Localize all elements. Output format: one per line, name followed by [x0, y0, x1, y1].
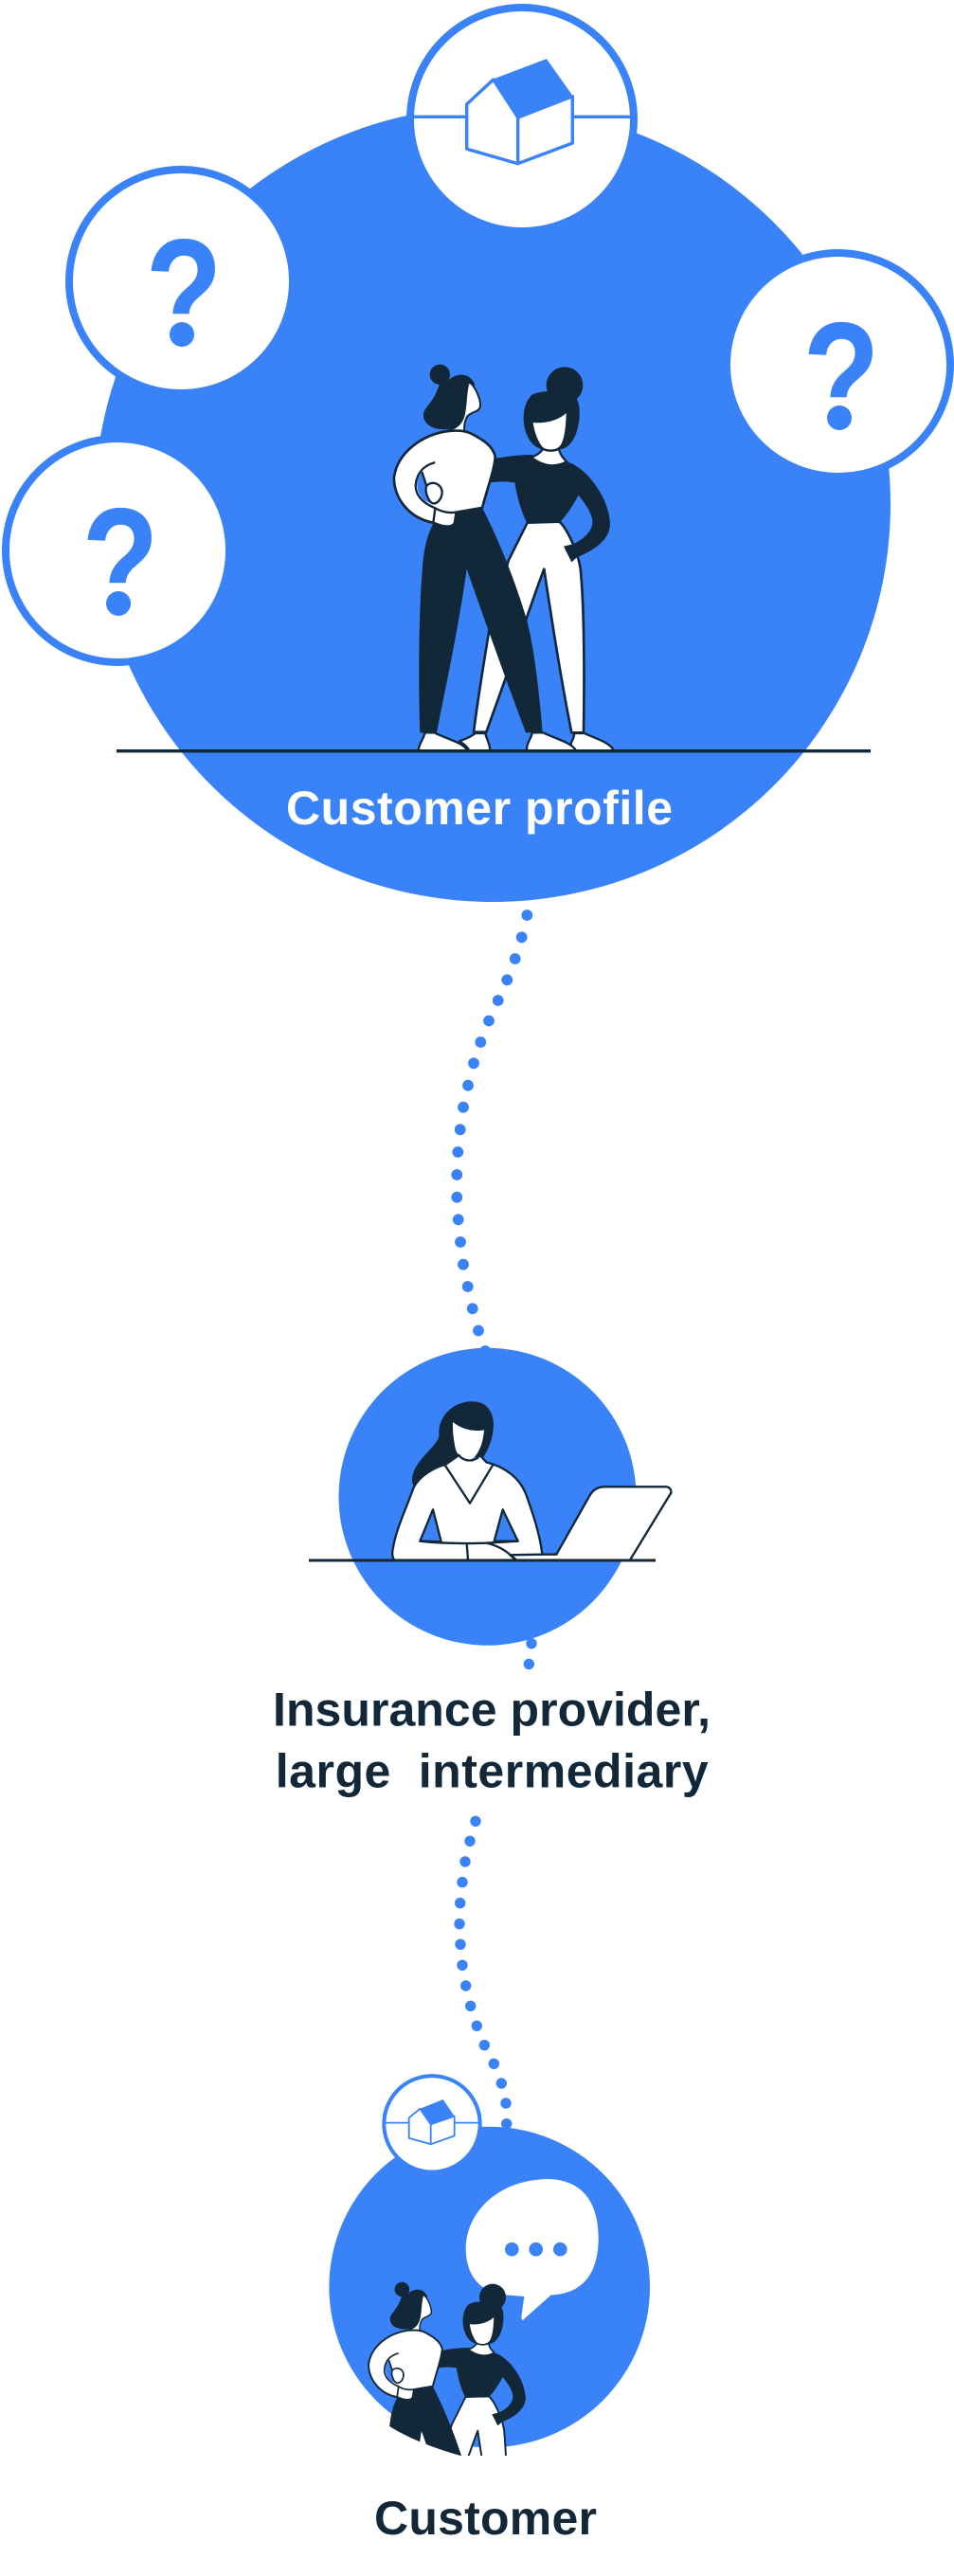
face [453, 1422, 484, 1460]
large blue circle [95, 106, 891, 902]
panel: customer [329, 2076, 650, 2563]
dotted connector: customer profile to insurance provider [451, 910, 532, 1357]
panel: insurance provider [309, 1348, 671, 1646]
dotted connector: insurance provider to label [524, 1638, 537, 1669]
laptop [510, 1486, 671, 1560]
icon: question mark bubble lower left [6, 439, 229, 662]
dotted connector: insurance provider to customer [454, 1816, 512, 2129]
illustration: two women cropped [368, 2281, 526, 2456]
heading: customer: Customer [374, 2492, 597, 2545]
table line [309, 1559, 656, 1561]
icon: question mark bubble right [727, 253, 950, 477]
icon: house in ring [410, 8, 634, 231]
heading: insurance provider, large intermediary: large intermediary [276, 1745, 709, 1798]
blue circle [329, 2127, 650, 2447]
icon: question mark bubble upper left: ? [145, 208, 223, 379]
heading: insurance provider, large intermediary: Insurance provider, [273, 1684, 711, 1737]
ground line [117, 749, 871, 752]
heading: insurance provider, large intermediary [273, 1684, 711, 1798]
torso and arms [392, 1455, 542, 1560]
illustration: two women standing [394, 365, 614, 751]
illustration: woman at laptop [392, 1401, 671, 1560]
icon: question mark bubble upper left [69, 170, 293, 393]
icon: question mark bubble lower left: ? [81, 477, 159, 648]
icon: speech bubble [466, 2179, 599, 2320]
icon: question mark bubble right: ? [802, 292, 880, 462]
panel: customer profile [6, 8, 950, 902]
blue circle [339, 1348, 637, 1646]
heading: customer profile: Customer profile [286, 782, 673, 835]
hair [412, 1401, 494, 1487]
neckline and arm gaps [420, 1465, 518, 1559]
icon: house in ring small [384, 2076, 480, 2171]
